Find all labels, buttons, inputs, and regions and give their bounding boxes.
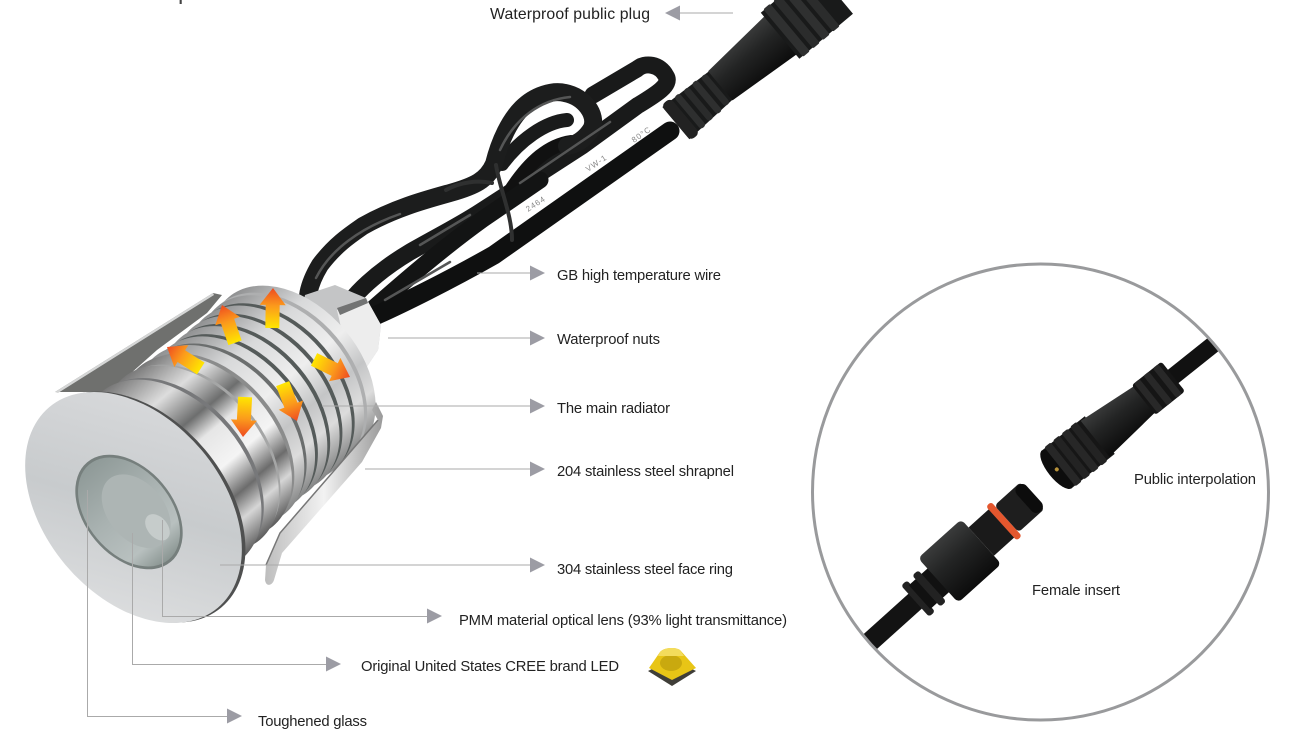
panel: connector detail circle xyxy=(812,264,1268,720)
rear stainless steel shrapnel xyxy=(55,293,222,392)
circle outline xyxy=(812,264,1268,720)
callout: toughened glass: Toughened glass xyxy=(258,714,367,730)
label: public interpolation: Public interpolation xyxy=(1134,472,1256,488)
black cable bundle xyxy=(307,65,670,321)
callout: CREE LED: Original United States CREE brand LED xyxy=(361,659,619,675)
product photo: LED underground light: 80°C xyxy=(630,125,653,145)
callout: the main radiator: The main radiator xyxy=(557,401,670,417)
callout: waterproof public plug xyxy=(490,6,733,23)
callout: GB high temperature wire: GB high temperature wire xyxy=(557,268,721,284)
heat dissipation arrows xyxy=(160,288,356,438)
front stainless steel shrapnel xyxy=(265,402,383,585)
icon: CREE LED chip xyxy=(648,648,696,686)
finned radiator body xyxy=(46,247,415,606)
waterproof connector plug xyxy=(656,0,854,147)
public interpolation connector xyxy=(1040,338,1218,489)
face ring xyxy=(0,348,289,667)
callout: 204 stainless steel shrapnel xyxy=(365,462,734,480)
callout: toughened glass xyxy=(88,490,367,730)
callout: 304 stainless steel face ring xyxy=(220,558,733,578)
optical lens and glass xyxy=(54,434,204,590)
product photo: LED underground light: VW-1 xyxy=(584,153,609,174)
callout: CREE LED xyxy=(132,533,619,675)
product photo: LED underground light xyxy=(0,0,854,667)
callout: GB high temperature wire xyxy=(477,266,721,284)
callout: PMM optical lens xyxy=(162,520,787,629)
callout: waterproof public plug: Waterproof public plug xyxy=(490,6,650,23)
callout: 204 stainless steel shrapnel: 204 stainless steel shrapnel xyxy=(557,464,734,480)
callout: waterproof nuts xyxy=(388,330,660,348)
label: female insert: Female insert xyxy=(1032,583,1120,599)
callout: the main radiator xyxy=(322,398,670,417)
waterproof nut xyxy=(300,285,381,368)
male and female connector photo xyxy=(815,298,1263,696)
wire print: 2464 xyxy=(524,194,547,214)
callout: waterproof nuts: Waterproof nuts xyxy=(557,332,660,348)
callout: 304 stainless steel face ring: 304 stainless steel face ring xyxy=(557,562,733,578)
callout: PMM optical lens: PMM material optical lens (93% light transmittance) xyxy=(459,613,787,629)
female insert connector xyxy=(864,484,1043,649)
